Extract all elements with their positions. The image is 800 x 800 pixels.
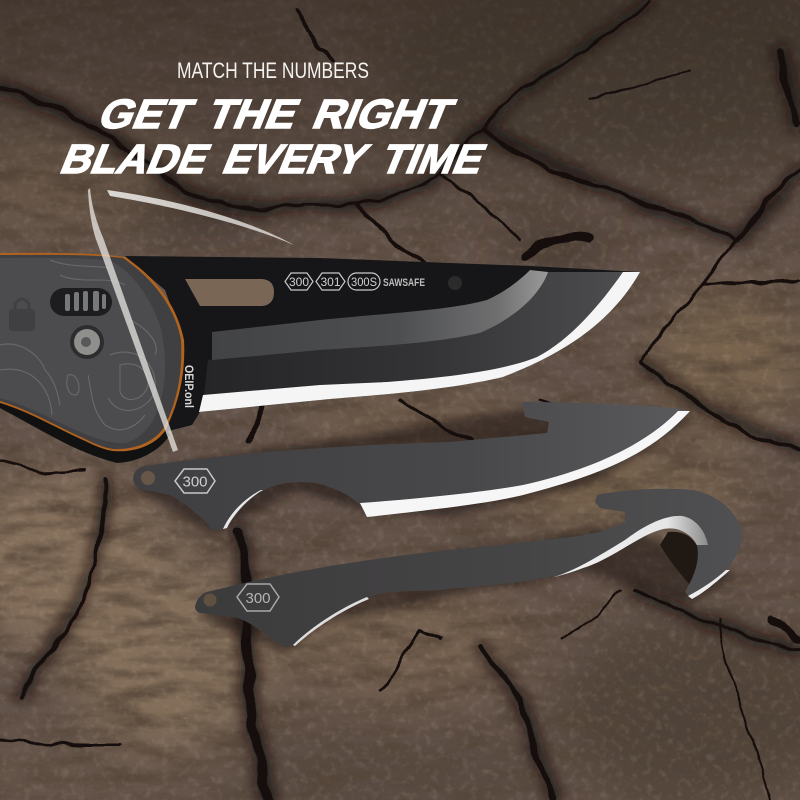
blade number badges: [285, 273, 380, 290]
panel: gut hook replacement blade: [133, 402, 692, 534]
arrow: hand-drawn line to gut hook badge: [88, 188, 178, 452]
blade white edge: [199, 272, 640, 412]
blade bevel: [212, 270, 548, 360]
mounting hole: [141, 471, 155, 485]
blade shadow: [197, 525, 735, 652]
blade lock text: OEIP.onl: [182, 365, 196, 408]
hook tip edge: [688, 570, 730, 599]
blade pivot dot: [448, 276, 462, 290]
panel: outfitter knife: [0, 253, 640, 463]
handle lock icon: [9, 299, 35, 331]
lower edge highlight: [293, 597, 369, 646]
blade cut-out hole: [185, 279, 274, 306]
arrow: hand-drawn line to blade number: [107, 190, 294, 245]
blade shadow: [138, 410, 692, 534]
hook white edge: [542, 516, 708, 580]
knife blade: 301: [320, 275, 341, 289]
knife blade: 300: [289, 275, 309, 289]
badge: 300: [175, 469, 215, 493]
handle thumb slide: [50, 288, 112, 316]
SawSafe label: SAWSAFE: [383, 277, 425, 289]
heading: [54, 91, 493, 183]
handle pivot screw: [70, 325, 104, 359]
handle liner: [0, 395, 170, 463]
badge: 300: 300: [182, 474, 208, 490]
panel: hook blade: [195, 489, 742, 652]
badge: 300: [237, 584, 279, 611]
badge: 300: 300: [245, 590, 271, 607]
notch edge highlight: [223, 490, 263, 529]
hook body: [195, 489, 742, 647]
hook interior shadow: [660, 532, 698, 585]
blade lower flat: [204, 272, 625, 395]
heading: GET THE RIGHT: [92, 91, 461, 138]
white cutting edge: [360, 411, 690, 517]
mounting hole: [204, 594, 216, 606]
subheading: MATCH THE NUMBERS: [177, 58, 369, 83]
knife blade: 300S: [351, 275, 377, 289]
heading: BLADE EVERY TIME: [54, 136, 493, 183]
blade body: [133, 402, 690, 530]
handle topographic pattern: [0, 260, 156, 430]
knife blade: [125, 256, 640, 432]
knife handle: [0, 253, 184, 463]
